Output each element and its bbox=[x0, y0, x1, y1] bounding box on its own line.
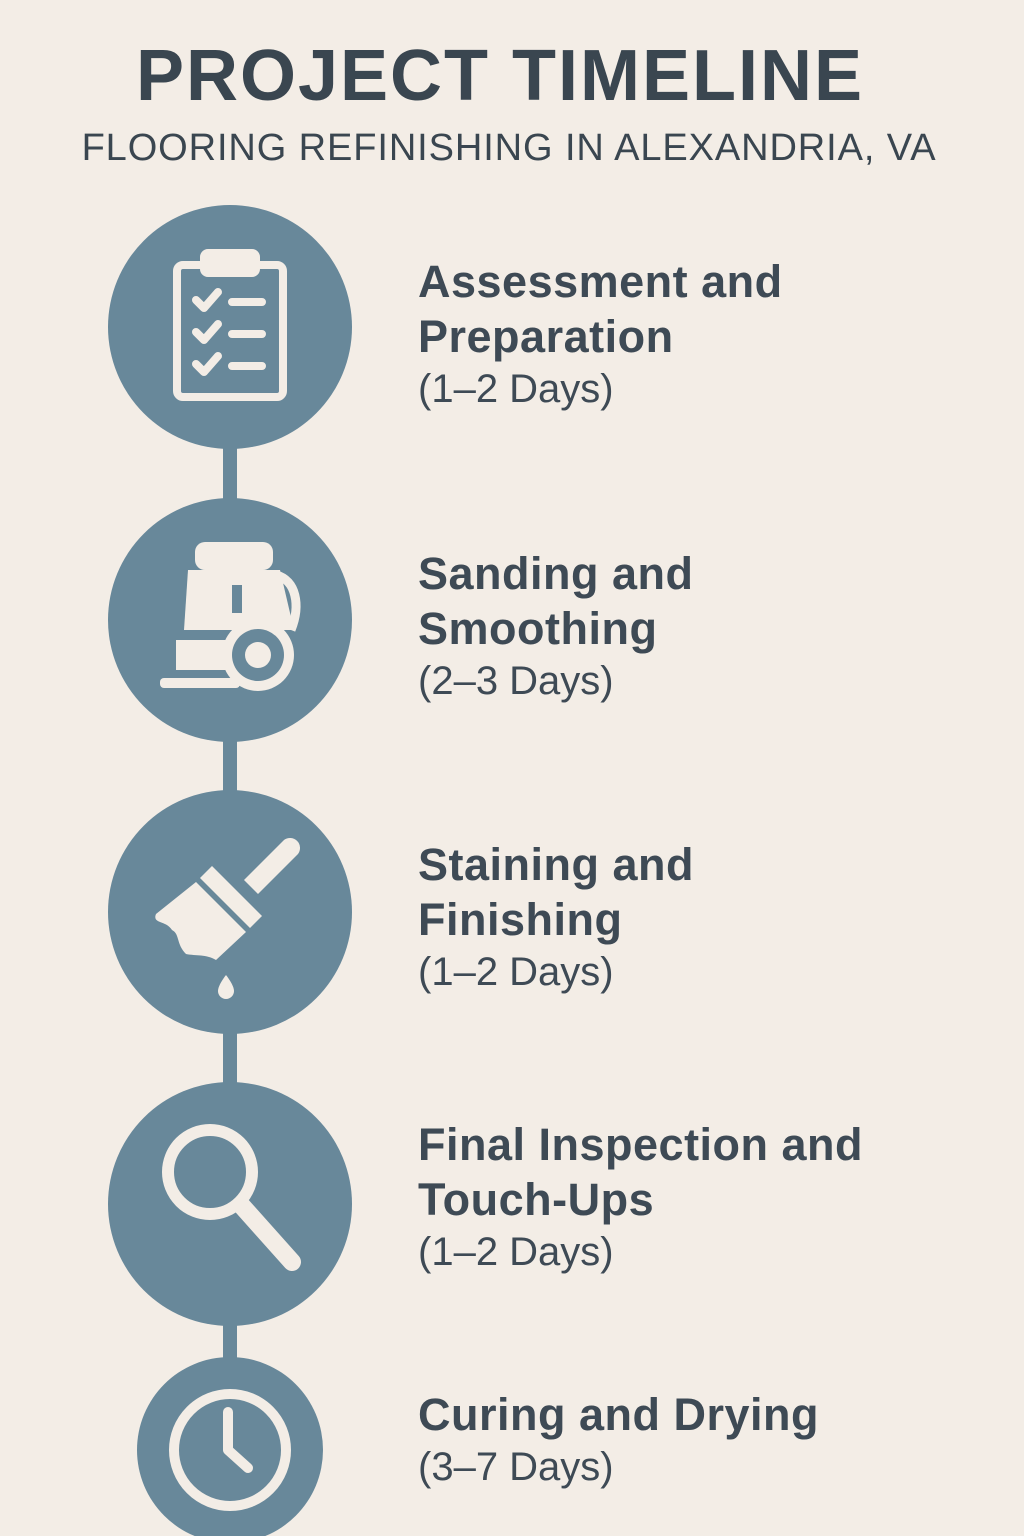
icon: paint brush bbox=[108, 790, 352, 1034]
step 4 text: Touch-Ups bbox=[418, 1174, 654, 1225]
title: PROJECT TIMELINE bbox=[136, 36, 864, 116]
step 4 text: Final Inspection and bbox=[418, 1119, 863, 1170]
step 4 text: (1–2 Days) bbox=[418, 1230, 614, 1274]
step 5 text: Curing and Drying bbox=[418, 1389, 819, 1440]
icon: floor sander bbox=[108, 498, 352, 742]
step 2 text: (2–3 Days) bbox=[418, 659, 614, 703]
step 3 text bbox=[418, 839, 694, 994]
icon: magnifier bbox=[108, 1082, 352, 1326]
subtitle: FLOORING REFINISHING IN ALEXANDRIA, VA bbox=[82, 127, 936, 169]
step 5 text bbox=[418, 1389, 819, 1489]
step 2 text bbox=[418, 548, 694, 703]
step 1 text: Assessment and bbox=[418, 256, 783, 307]
step 3 text: Finishing bbox=[418, 894, 622, 945]
icon: clock bbox=[137, 1357, 323, 1536]
step 3 text: (1–2 Days) bbox=[418, 950, 614, 994]
step 1 text: (1–2 Days) bbox=[418, 367, 614, 411]
connector line bbox=[223, 440, 237, 1380]
icon: clipboard bbox=[108, 205, 352, 449]
step 2 text: Smoothing bbox=[418, 603, 657, 654]
step 5 text: (3–7 Days) bbox=[418, 1445, 614, 1489]
step 1 text bbox=[418, 256, 783, 411]
step 4 text bbox=[418, 1119, 863, 1274]
step 1 text: Preparation bbox=[418, 311, 674, 362]
step 3 text: Staining and bbox=[418, 839, 694, 890]
step 2 text: Sanding and bbox=[418, 548, 694, 599]
